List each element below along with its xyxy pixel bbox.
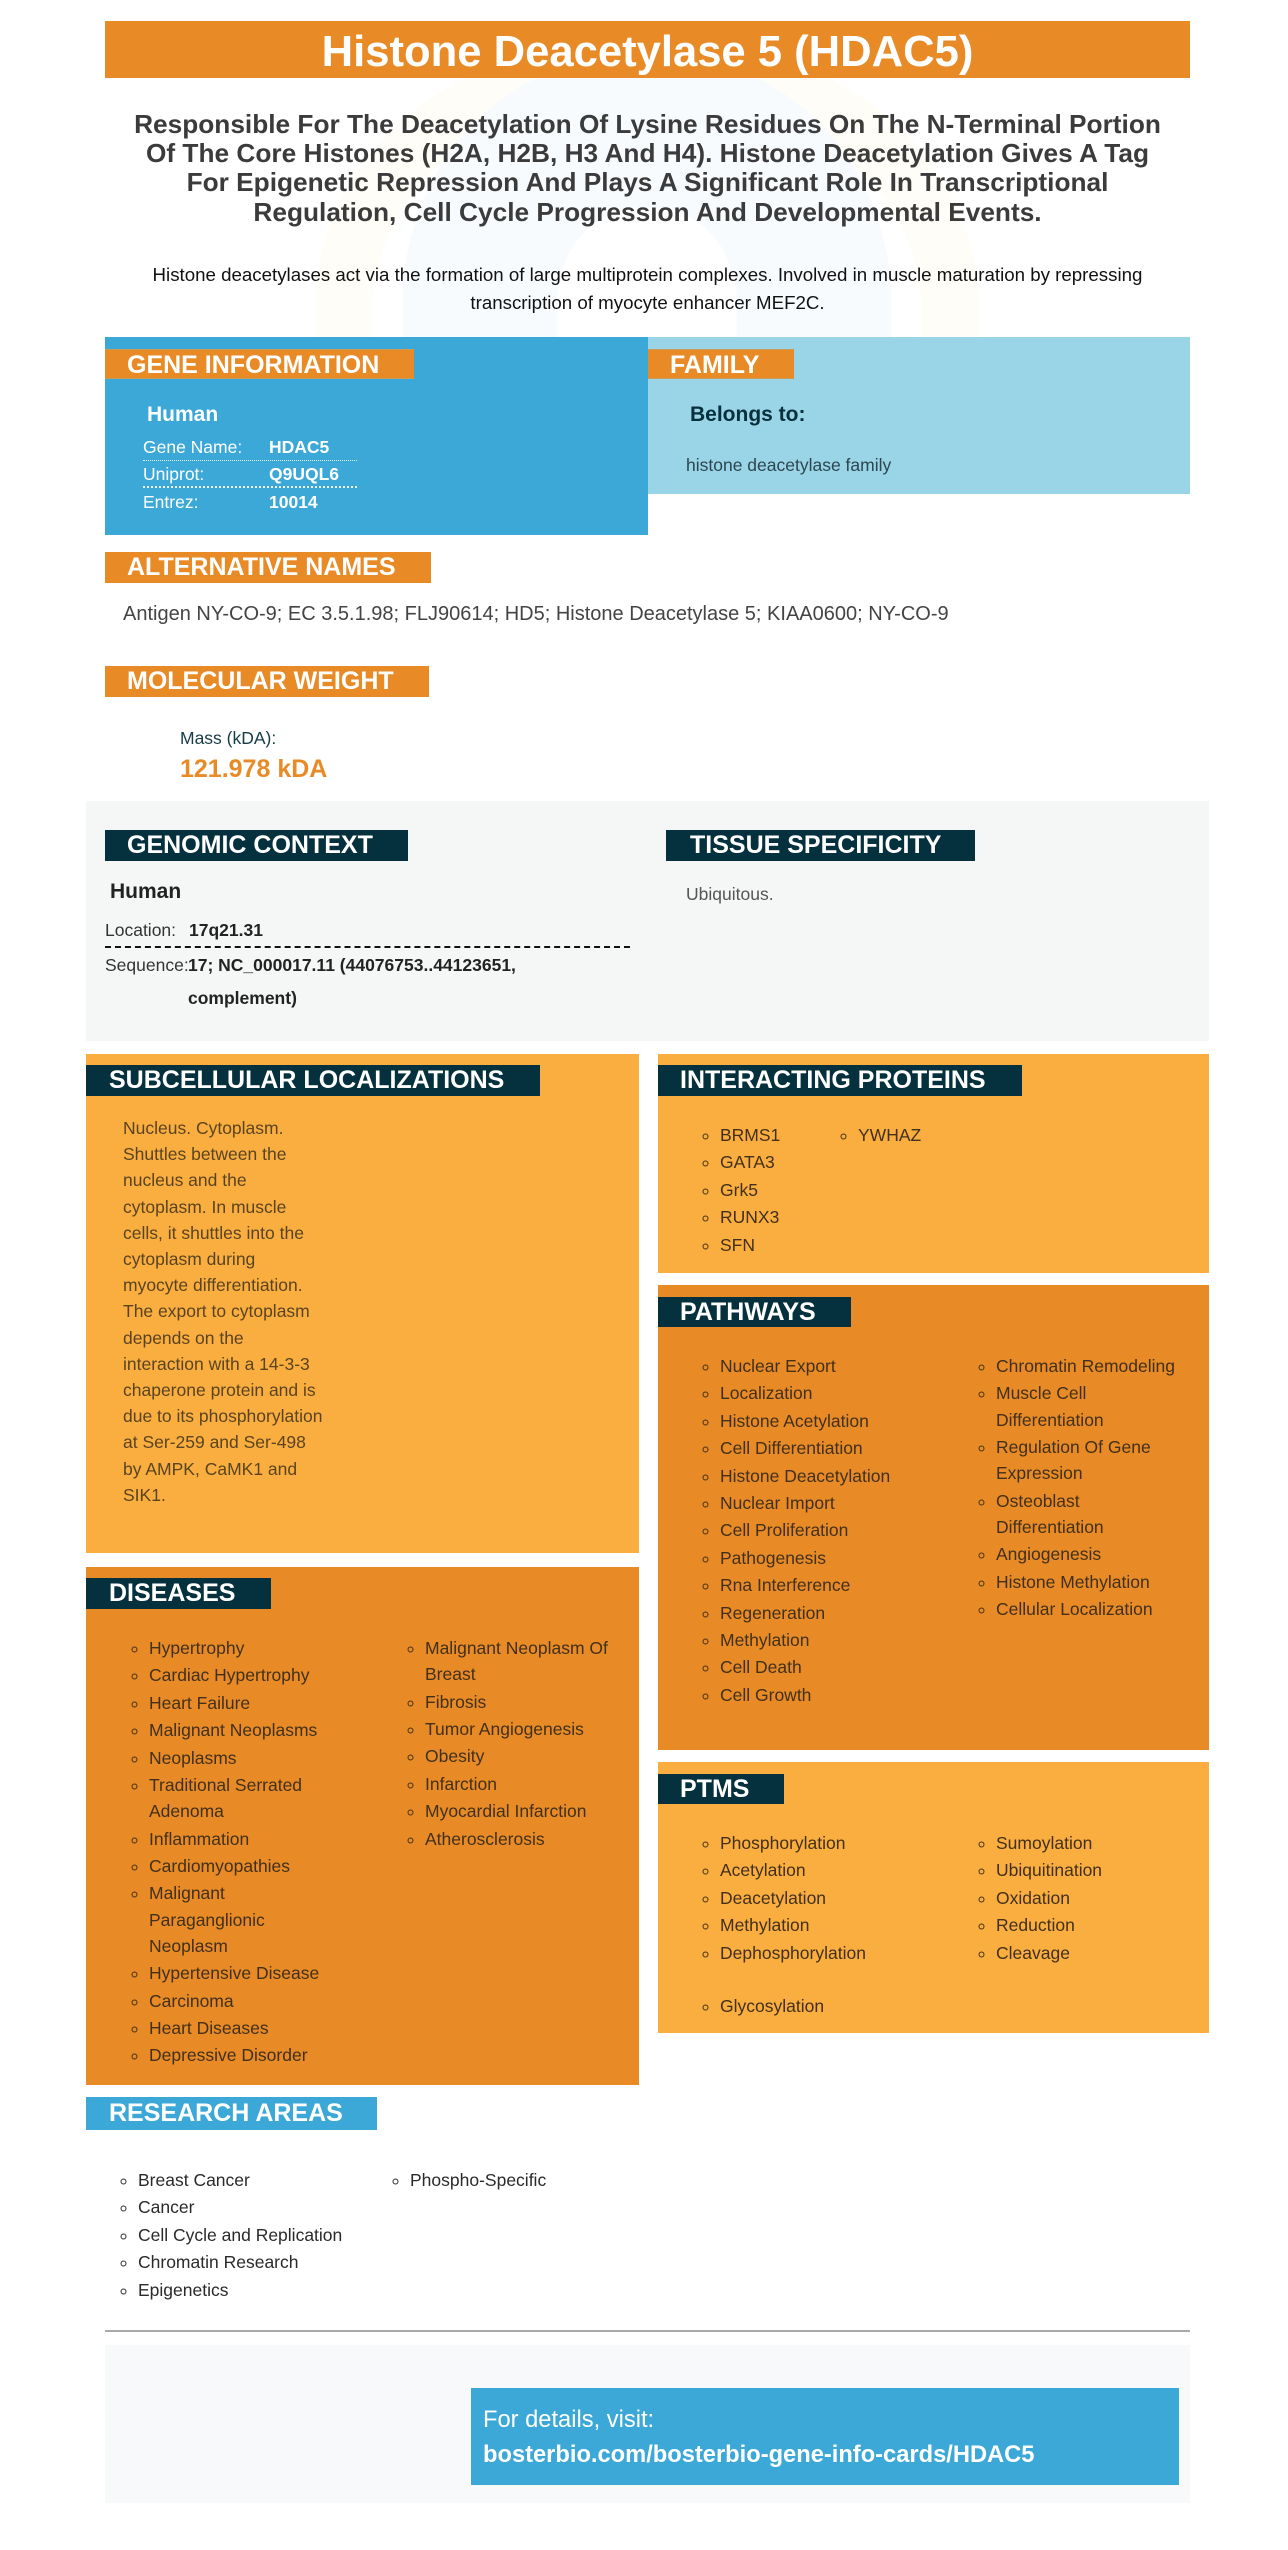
disease list column 1: Cardiac Hypertrophy — [149, 1665, 309, 1685]
heading: research areas: RESEARCH AREAS — [109, 2099, 343, 2127]
uniprot row — [143, 461, 357, 488]
panel: ptms — [658, 1762, 1209, 2033]
localization text: depends on the — [123, 1328, 244, 1348]
location row: 17q21.31 — [189, 920, 263, 940]
localization text — [123, 1118, 322, 1505]
section: research areas — [86, 2097, 546, 2300]
pathway list column 1: Histone Deacetylation — [720, 1466, 890, 1486]
ptm list column 1: Phosphorylation — [720, 1833, 846, 1853]
sequence row: 17; NC_000017.11 (44076753..44123651, — [188, 955, 516, 975]
panel: interacting proteins — [658, 1054, 1209, 1273]
localization text: nucleus and the — [123, 1170, 247, 1190]
title banner: Histone Deacetylase 5 (HDAC5) — [322, 28, 973, 76]
ptm list column 1 — [702, 1833, 866, 2016]
alternative names list: Antigen NY-CO-9; EC 3.5.1.98; FLJ90614; HD5; Histone Deacetylase 5; KIAA0600; NY-CO-9 — [123, 603, 949, 625]
footer panel — [105, 2345, 1190, 2503]
pathway list column 2 — [978, 1356, 1175, 1619]
details label: For details, visit: — [483, 2407, 654, 2433]
protein list column 1: RUNX3 — [720, 1207, 779, 1227]
heading: family — [648, 349, 794, 379]
localization text: cytoplasm during — [123, 1249, 255, 1269]
entrez row: Entrez: — [143, 492, 198, 512]
localization text: cells, it shuttles into the — [123, 1223, 304, 1243]
pathway list column 2: Angiogenesis — [996, 1544, 1101, 1564]
entrez row — [143, 492, 318, 512]
heading: ptms — [658, 1774, 784, 1804]
disease list column 1: Heart Diseases — [149, 2018, 269, 2038]
heading: alternative names: ALTERNATIVE NAMES — [127, 553, 396, 581]
ptm list column 1: Glycosylation — [720, 1996, 824, 2016]
pathway list column 2: Histone Methylation — [996, 1572, 1150, 1592]
ptm list column 1: Dephosphorylation — [720, 1943, 866, 1963]
pathway list column 1: Pathogenesis — [720, 1548, 826, 1568]
heading: family: FAMILY — [670, 351, 759, 379]
gene name row: Gene Name: — [143, 437, 242, 457]
research list column 1: Cell Cycle and Replication — [138, 2225, 342, 2245]
disease list column 2: Malignant Neoplasm Of — [425, 1638, 608, 1658]
protein list column 2: YWHAZ — [858, 1125, 921, 1145]
localization text: myocyte differentiation. — [123, 1275, 303, 1295]
location row — [105, 917, 630, 948]
ptm list column 2: Cleavage — [996, 1943, 1070, 1963]
disease list column 2: Obesity — [425, 1746, 484, 1766]
ptm list column 1: Methylation — [720, 1915, 810, 1935]
species label: Human — [110, 880, 181, 903]
pathway list column 1: Histone Acetylation — [720, 1411, 869, 1431]
localization text: due to its phosphorylation — [123, 1406, 322, 1426]
research list column 1: Breast Cancer — [138, 2170, 250, 2190]
mass label: Mass (kDA): — [180, 728, 276, 748]
disease list column 1: Cardiomyopathies — [149, 1856, 290, 1876]
heading: diseases — [86, 1578, 271, 1609]
entrez row: 10014 — [269, 492, 318, 512]
pathway list column 2: Expression — [996, 1463, 1083, 1483]
tissue specificity text: Ubiquitous. — [686, 884, 774, 904]
gene name row: HDAC5 — [269, 437, 329, 457]
protein list column 1: Grk5 — [720, 1180, 758, 1200]
sequence row: Sequence: — [105, 955, 189, 975]
pathway list column 2: Muscle Cell — [996, 1383, 1086, 1403]
subtitle summary: Regulation, Cell Cycle Progression And Developmental Events. — [253, 197, 1042, 227]
research list column 1 — [120, 2170, 342, 2300]
disease list column 2: Breast — [425, 1664, 476, 1684]
heading: diseases: DISEASES — [109, 1579, 235, 1607]
call to action box — [471, 2388, 1179, 2485]
heading: pathways — [658, 1297, 851, 1327]
localization text: cytoplasm. In muscle — [123, 1197, 286, 1217]
localization text: by AMPK, CaMK1 and — [123, 1459, 297, 1479]
pathway list column 1: Regeneration — [720, 1603, 825, 1623]
disease list column 1: Neoplasms — [149, 1748, 237, 1768]
pathway list column 1: Nuclear Export — [720, 1356, 836, 1376]
pathway list column 1: Localization — [720, 1383, 812, 1403]
panel: family — [648, 337, 1190, 494]
pathway list column 1: Rna Interference — [720, 1575, 850, 1595]
mass value: 121.978 kDA — [180, 755, 327, 783]
subtitle summary: Responsible For The Deacetylation Of Lysine Residues On The N-Terminal Portion — [134, 109, 1161, 139]
disease list column 1 — [132, 1638, 319, 2065]
localization text: interaction with a 14-3-3 — [123, 1354, 310, 1374]
ptm list column 2: Sumoylation — [996, 1833, 1092, 1853]
disease list column 2: Myocardial Infarction — [425, 1801, 586, 1821]
sequence row — [105, 955, 516, 1008]
background watermark logo — [0, 0, 1288, 340]
heading: tissue specificity: TISSUE SPECIFICITY — [690, 831, 941, 859]
gene name row — [143, 434, 357, 461]
disease list column 1: Paraganglionic — [149, 1910, 265, 1930]
research list column 1: Cancer — [138, 2197, 194, 2217]
species label: Human — [147, 403, 218, 426]
pathway list column 1: Cell Death — [720, 1657, 802, 1677]
disease list column 1: Traditional Serrated — [149, 1775, 302, 1795]
heading: research areas — [86, 2097, 377, 2130]
localization text: SIK1. — [123, 1485, 166, 1505]
subtitle summary: Of The Core Histones (H2A, H2B, H3 And H4). Histone Deacetylation Gives A Tag — [146, 138, 1149, 168]
section: molecular weight — [105, 666, 429, 783]
panel: gene information — [105, 337, 648, 535]
disease list column 1: Depressive Disorder — [149, 2045, 308, 2065]
localization text: Nucleus. Cytoplasm. — [123, 1118, 283, 1138]
uniprot row: Uniprot: — [143, 464, 204, 484]
description paragraph: Histone deacetylases act via the formation of large multiprotein complexes. Involved in muscle maturation by repressing — [153, 264, 1142, 285]
disease list column 2: Tumor Angiogenesis — [425, 1719, 584, 1739]
research list column 1: Chromatin Research — [138, 2252, 298, 2272]
pathway list column 2: Chromatin Remodeling — [996, 1356, 1175, 1376]
pathway list column 1: Nuclear Import — [720, 1493, 835, 1513]
protein list column 1 — [702, 1125, 780, 1255]
panel: diseases — [86, 1567, 639, 2085]
heading: interacting proteins: INTERACTING PROTEINS — [680, 1066, 986, 1094]
disease list column 2: Fibrosis — [425, 1692, 486, 1712]
disease list column 1: Adenoma — [149, 1801, 224, 1821]
panel: subcellular localizations — [86, 1054, 639, 1553]
disease list column 2: Atherosclerosis — [425, 1829, 545, 1849]
description paragraph — [153, 264, 1142, 313]
pathway list column 2: Differentiation — [996, 1517, 1104, 1537]
localization text: Shuttles between the — [123, 1144, 286, 1164]
disease list column 2 — [408, 1638, 608, 1849]
pathway list column 1: Cell Growth — [720, 1685, 811, 1705]
pathway list column 1: Cell Differentiation — [720, 1438, 863, 1458]
ptm list column 1: Acetylation — [720, 1860, 806, 1880]
ptm list column 1: Deacetylation — [720, 1888, 826, 1908]
research list column 1: Epigenetics — [138, 2280, 228, 2300]
localization text: at Ser-259 and Ser-498 — [123, 1432, 306, 1452]
disease list column 1: Neoplasm — [149, 1936, 228, 1956]
protein list column 1: BRMS1 — [720, 1125, 780, 1145]
disease list column 1: Hypertrophy — [149, 1638, 244, 1658]
pathway list column 2: Osteoblast — [996, 1491, 1080, 1511]
heading: molecular weight: MOLECULAR WEIGHT — [127, 667, 394, 695]
disease list column 2: Infarction — [425, 1774, 497, 1794]
pathway list column 1: Cell Proliferation — [720, 1520, 848, 1540]
description paragraph: transcription of myocyte enhancer MEF2C. — [470, 292, 825, 313]
disease list column 1: Heart Failure — [149, 1693, 250, 1713]
panel: genomic context and tissue specificity — [86, 801, 1209, 1041]
panel: pathways — [658, 1285, 1209, 1750]
heading: ptms: PTMS — [680, 1775, 749, 1803]
disease list column 1: Malignant — [149, 1883, 225, 1903]
pathway list column 2: Differentiation — [996, 1410, 1104, 1430]
uniprot row: Q9UQL6 — [269, 464, 339, 484]
heading: gene information: GENE INFORMATION — [127, 351, 379, 379]
title banner — [105, 21, 1190, 78]
section: alternative names — [105, 552, 949, 625]
location row: Location: — [105, 920, 176, 940]
pathway list column 1 — [702, 1356, 890, 1705]
ptm list column 2 — [978, 1833, 1102, 1963]
research list column 2: Phospho-Specific — [410, 2170, 546, 2190]
ptm list column 2: Ubiquitination — [996, 1860, 1102, 1880]
disease list column 1: Malignant Neoplasms — [149, 1720, 317, 1740]
heading: pathways: PATHWAYS — [680, 1298, 816, 1326]
details link: bosterbio.com/bosterbio-gene-info-cards/HDAC5 — [483, 2442, 1034, 2468]
ptm list column 2: Reduction — [996, 1915, 1075, 1935]
pathway list column 2: Regulation Of Gene — [996, 1437, 1151, 1457]
disease list column 1: Inflammation — [149, 1829, 249, 1849]
localization text: The export to cytoplasm — [123, 1301, 310, 1321]
heading: genomic context: GENOMIC CONTEXT — [127, 831, 373, 859]
protein list column 1: GATA3 — [720, 1152, 775, 1172]
pathway list column 2: Cellular Localization — [996, 1599, 1153, 1619]
disease list column 1: Carcinoma — [149, 1991, 234, 2011]
family name: histone deacetylase family — [686, 455, 891, 475]
protein list column 1: SFN — [720, 1235, 755, 1255]
sequence row: complement) — [188, 988, 297, 1008]
subtitle summary: For Epigenetic Repression And Plays A Significant Role In Transcriptional — [187, 167, 1108, 197]
heading: subcellular localizations: SUBCELLULAR LOCALIZATIONS — [109, 1066, 504, 1094]
subtitle summary — [134, 109, 1161, 227]
belongs to label: Belongs to: — [690, 403, 806, 426]
disease list column 1: Hypertensive Disease — [149, 1963, 319, 1983]
ptm list column 2: Oxidation — [996, 1888, 1070, 1908]
localization text: chaperone protein and is — [123, 1380, 316, 1400]
pathway list column 1: Methylation — [720, 1630, 810, 1650]
